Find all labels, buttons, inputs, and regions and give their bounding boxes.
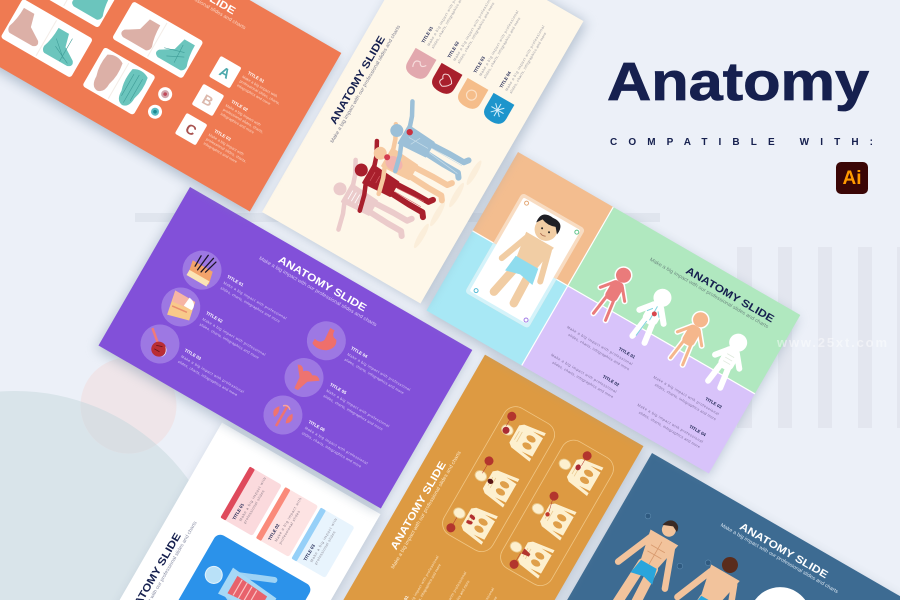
slide subtitle: Make a big impact with our professional slides and charts xyxy=(648,257,770,330)
item text 02: TITLE 02 xyxy=(602,374,621,388)
decorative background circles and bars xyxy=(0,213,900,600)
item text 04 xyxy=(344,345,415,397)
slide title: ANATOMY SLIDE xyxy=(684,265,776,325)
slide title: ANATOMY SLIDE xyxy=(388,459,449,552)
item text 01: TITLE 01 xyxy=(618,346,637,360)
floor shadows xyxy=(412,152,484,257)
item text 03 xyxy=(203,127,253,168)
slide title: ANATOMY SLIDE xyxy=(737,521,830,581)
item text 03: Make a big impact with professional xyxy=(479,10,520,77)
slide subtitle: Make a big impact with our professional slides and charts xyxy=(390,450,463,570)
item text 04: Make a big impact with professional xyxy=(637,403,704,444)
item text 06: Make a big impact with professional xyxy=(304,426,369,466)
text blocks xyxy=(396,551,501,600)
item text 06: TITLE 06 xyxy=(308,419,326,433)
item text 05: slides, charts, infographics and more xyxy=(323,394,383,431)
body: muscles xyxy=(338,138,444,240)
item text 03: TITLE 03 xyxy=(213,128,232,142)
item text 03: Make a big impact with xyxy=(208,133,244,156)
letter card A: A xyxy=(217,63,233,82)
icon: hair follicle xyxy=(175,244,229,297)
item text 03: infographics and more xyxy=(203,142,238,164)
item text 04: slides, charts, infographics and more xyxy=(638,411,701,449)
slide: mustard with torsos xyxy=(322,355,647,600)
card 02: professional slides xyxy=(278,510,301,545)
item text 03: professional slides, charts, xyxy=(205,137,247,164)
item text 01: slides, charts, infographics and more xyxy=(567,333,630,371)
icon: uterus xyxy=(277,351,331,404)
foot card lower left xyxy=(0,0,93,78)
body: vascular xyxy=(374,99,480,200)
slide: steel blue with muscular men xyxy=(558,453,900,600)
body: organs xyxy=(357,122,463,223)
card 03: professional slides xyxy=(314,530,336,565)
item text 02 xyxy=(220,97,270,139)
front man figure xyxy=(594,507,696,600)
item text 03: slides, charts, infographics and more xyxy=(654,383,717,421)
watermark: www.25xt.com xyxy=(776,335,887,350)
icon: Adobe Illustrator xyxy=(836,162,868,194)
item text 03 xyxy=(650,368,724,421)
item text 05: TITLE 05 xyxy=(329,382,348,396)
item text 01 xyxy=(220,274,291,326)
item text 02 xyxy=(199,310,270,362)
boy figure xyxy=(485,206,571,309)
item text 01: Make a big impact with xyxy=(241,75,278,98)
card 03: Make a big impact with xyxy=(310,518,338,563)
item text 01: professional slides, charts, xyxy=(239,79,281,106)
outline groups xyxy=(438,402,618,590)
item text 04: TITLE 04 xyxy=(350,345,369,359)
item text 02: Make a big impact with professional xyxy=(550,353,617,394)
photo card with boy xyxy=(465,193,586,329)
card 02: Make a big impact with xyxy=(274,497,303,542)
slide subtitle: Make a big impact with our professional slides and charts xyxy=(329,24,402,144)
colour quadrants xyxy=(426,152,800,473)
item text 01 xyxy=(236,69,287,110)
letter card B: B xyxy=(199,91,216,110)
callout dots xyxy=(630,512,717,581)
item text 02: Make a big impact with professional xyxy=(202,317,266,357)
item text 02: Make a big impact with xyxy=(225,103,261,127)
item text 06: slides, charts, infographics and more xyxy=(301,431,362,469)
pocket icon 03 xyxy=(455,78,488,112)
letter card C xyxy=(175,113,208,146)
compatible with label: COMPATIBLE WITH: xyxy=(610,137,873,148)
numbered badges xyxy=(442,407,593,575)
icon: Adobe Illustrator: Ai xyxy=(842,168,862,189)
item text 03: slides, charts, infographics and more xyxy=(177,360,238,397)
letter card B xyxy=(192,84,224,116)
item text 04: Make a big impact with professional xyxy=(347,352,411,392)
item text 03: TITLE 03 xyxy=(704,396,723,410)
slide: purple with organ icons xyxy=(96,187,472,512)
foot card portrait xyxy=(82,47,156,115)
slide title: ANATOMY SLIDE xyxy=(328,34,388,127)
body: skeleton xyxy=(317,157,423,259)
slide: colour blocks with child body xyxy=(424,152,800,477)
letter card C: C xyxy=(183,120,199,139)
item text 01: slides, charts, infographics and more xyxy=(220,286,281,324)
card 03 xyxy=(291,507,355,578)
item text 02: professional slides, charts, xyxy=(222,108,264,134)
item text 02: slides, charts, infographics and more xyxy=(199,322,260,360)
item text 06 xyxy=(301,419,373,471)
item text 01: TITLE 01 xyxy=(421,25,434,44)
item text 01: infographics and more xyxy=(236,84,271,106)
white circle xyxy=(738,576,822,600)
item text 01: Make a big impact with professional xyxy=(566,325,633,366)
main heading: Anatomy xyxy=(607,52,869,112)
item text 04: slides, charts, infographics and more xyxy=(344,358,404,395)
pocket icon 04 xyxy=(481,93,514,127)
item text 02: TITLE 02 xyxy=(205,310,224,324)
item text 03: Make a big impact with professional xyxy=(653,375,720,416)
torso figures xyxy=(445,412,604,579)
item text 02: slides, charts, infographics and more xyxy=(457,2,495,64)
item text 02: slides, charts, infographics and more xyxy=(551,361,614,399)
item text 03: TITLE 03 xyxy=(472,55,486,74)
item text 03: slides, charts, infographics and more xyxy=(483,17,521,79)
icon: kidneys xyxy=(256,388,310,442)
slide subtitle: Make a big impact with our professional slides and charts xyxy=(258,256,378,328)
foot card top left xyxy=(28,0,120,28)
item text 01 xyxy=(563,318,637,371)
item text 04: slides, charts, infographics and more xyxy=(509,32,547,94)
item text 02 xyxy=(547,346,621,399)
item text 05: Make a big impact with professional xyxy=(326,389,390,428)
item text 03: TITLE 03 xyxy=(184,348,203,361)
item text 02: infographics and more xyxy=(220,112,255,135)
icon: skin layers xyxy=(154,280,207,334)
item text 01: Make a big impact with professional xyxy=(223,281,287,320)
pocket icon 01 xyxy=(403,48,436,82)
item text 01: TITLE 01 xyxy=(247,70,266,84)
item text 02: TITLE 02 xyxy=(230,99,249,113)
item text 04: TITLE 04 xyxy=(498,70,512,89)
item text 02: TITLE 02 xyxy=(447,40,460,59)
item text 05 xyxy=(323,382,394,434)
pocket icon 02 xyxy=(429,63,462,97)
slide: orange with feet xyxy=(0,0,341,215)
item text 04: Make a big impact with professional xyxy=(505,25,546,92)
icon: eye xyxy=(133,317,187,371)
card 01: TITLE 01 xyxy=(231,502,245,521)
letter card A xyxy=(209,56,242,88)
item text 03 xyxy=(177,348,249,399)
card 01 xyxy=(220,466,282,536)
slide title: ANATOMY SLIDE xyxy=(276,254,368,314)
item text 01: TITLE 01 xyxy=(226,274,245,288)
foot card top right xyxy=(112,1,204,79)
item text 04: TITLE 04 xyxy=(688,424,707,438)
blue panel with torso xyxy=(133,532,313,600)
item text 03: Make a big impact with professional xyxy=(180,355,245,394)
card 02 xyxy=(256,487,318,557)
small target icons xyxy=(145,85,175,121)
child systems row xyxy=(587,263,754,391)
slide: cream with four body systems xyxy=(262,0,587,306)
rear man figure xyxy=(653,543,759,600)
card 01: Make a big impact with xyxy=(239,477,267,522)
card 01: professional slides xyxy=(243,489,265,524)
card 02: TITLE 02 xyxy=(267,522,281,541)
slide subtitle: Make a big impact with our professional slides and charts xyxy=(719,522,840,595)
icon: stomach xyxy=(300,314,353,367)
item text 01 xyxy=(421,0,472,49)
item text 04 xyxy=(634,396,708,449)
card 03: TITLE 03 xyxy=(303,543,316,562)
slide: white with torso panel xyxy=(59,423,384,600)
